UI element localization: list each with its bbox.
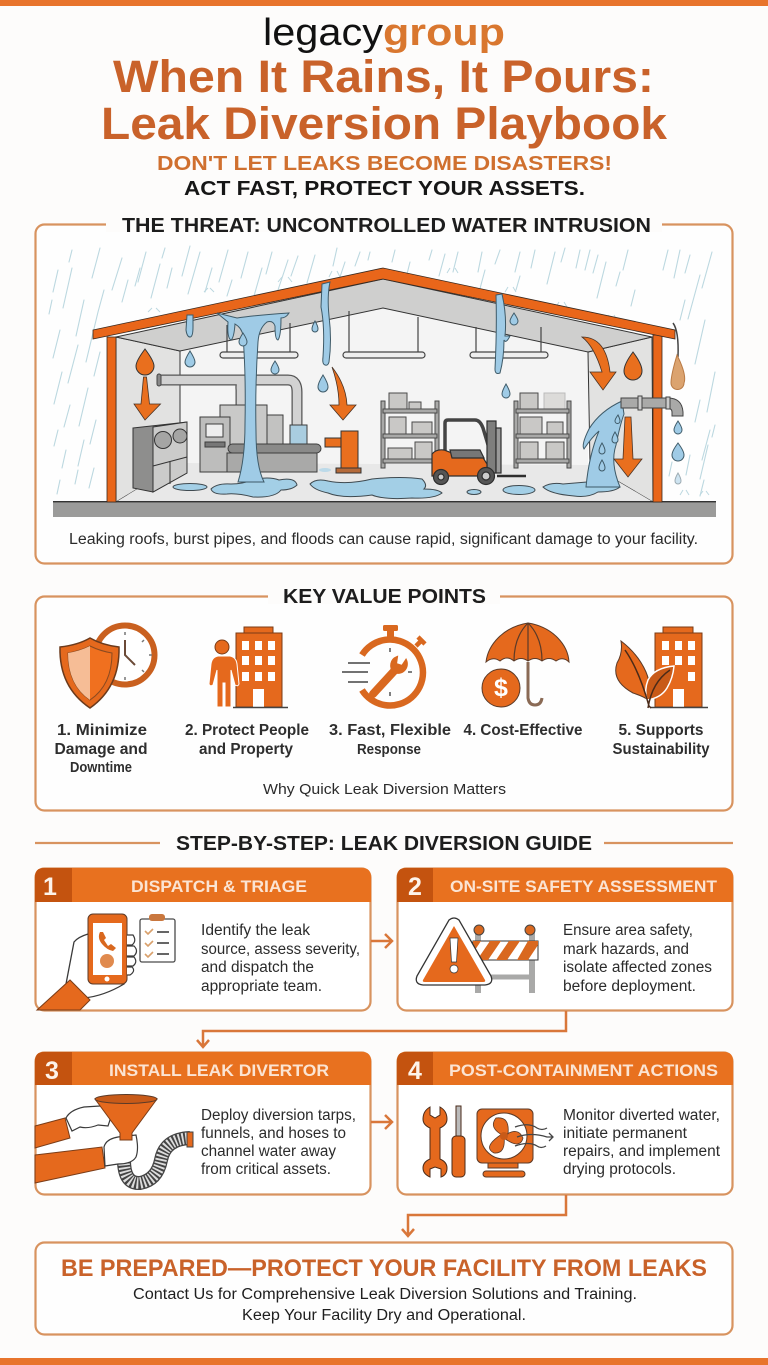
caption: why quick leak diversion matters: Why Quick Leak Diversion Matters <box>263 781 506 798</box>
labels: value points: and Property <box>199 741 293 758</box>
step card 1: dispatch and triage <box>35 868 371 1010</box>
step card 4: post-containment actions: 4 <box>408 1057 422 1085</box>
orange valve <box>325 431 361 473</box>
ductwork <box>157 374 297 425</box>
icon: person and building <box>209 627 288 708</box>
arrow: step 2 to step 3 <box>197 1011 566 1047</box>
text: step 3 <box>201 1107 356 1178</box>
ground slab <box>53 502 716 517</box>
icon: road barrier <box>473 925 538 993</box>
icon: drying fan <box>477 1109 553 1177</box>
bottom accent bar <box>0 1358 768 1365</box>
text: step 4: initiate permanent <box>563 1125 688 1142</box>
floor <box>116 463 653 502</box>
heading: the threat: THE THREAT: UNCONTROLLED WATER INTRUSION <box>122 214 651 237</box>
labels: value points: Damage and <box>54 741 148 758</box>
labels: value points <box>54 722 710 776</box>
orange drops <box>136 349 642 380</box>
text: step 2: isolate affected zones <box>563 959 712 976</box>
logo: legacygroup: legacy <box>263 12 383 54</box>
illustration: leaking warehouse <box>49 246 716 517</box>
icon: shield and clock <box>60 626 154 708</box>
labels: value points: 4. Cost-Effective <box>464 722 583 739</box>
outside roof drip <box>671 323 685 390</box>
text: step 2: mark hazards, and <box>563 941 689 958</box>
icon: checklist clipboard <box>140 914 175 962</box>
text: step 4: Monitor diverted water, <box>563 1107 720 1124</box>
step card 1: dispatch and triage: DISPATCH & TRIAGE <box>131 877 307 896</box>
labels: value points: Downtime <box>70 759 132 776</box>
title <box>101 51 668 149</box>
text: step 1: and dispatch the <box>201 959 314 976</box>
icon: stopwatch with wrench <box>342 625 425 706</box>
top accent bar <box>0 0 768 6</box>
step card 2: on-site safety assessment: ON-SITE SAFETY ASSESSMENT <box>450 877 718 896</box>
step card 2: on-site safety assessment: 2 <box>408 873 422 901</box>
step card 4: post-containment actions: POST-CONTAINMENT ACTIONS <box>449 1061 718 1080</box>
back wall <box>180 308 588 466</box>
step card 3: install leak divertor: 3 <box>45 1057 59 1085</box>
side walls <box>116 337 180 502</box>
text: contact: Keep Your Facility Dry and Operational. <box>242 1307 526 1324</box>
burst pipe <box>621 396 683 416</box>
arrow: step 4 to call to action <box>402 1195 566 1236</box>
subtitle: DON'T LET LEAKS BECOME DISASTERS! <box>157 152 612 175</box>
text: step 1 <box>201 922 360 995</box>
ceiling <box>116 279 652 352</box>
text: step 1: source, assess severity, <box>201 941 360 958</box>
step card 3: install leak divertor <box>35 1052 371 1194</box>
panel: key value points <box>36 585 732 810</box>
forklift <box>432 420 526 484</box>
arrow: step 1 to step 2 <box>371 934 392 948</box>
ceiling lights <box>220 311 548 358</box>
icon: wrench and screwdriver <box>423 1106 465 1177</box>
heading: key value points: KEY VALUE POINTS <box>283 585 486 608</box>
icon: leaves and building <box>616 627 708 708</box>
threat caption: Leaking roofs, burst pipes, and floods can cause rapid, significant damage to your facility. <box>69 531 698 548</box>
text: step 4: repairs, and implement <box>563 1143 721 1160</box>
text: step 2: Ensure area safety, <box>563 922 693 939</box>
text: step 3: Deploy diversion tarps, <box>201 1107 356 1124</box>
labels: value points: Sustainability <box>612 741 710 758</box>
text: step 3: funnels, and hoses to <box>201 1125 346 1142</box>
arrow: step 3 to step 4 <box>371 1115 392 1129</box>
panel: the threat <box>36 214 732 564</box>
labels: value points: Response <box>357 741 421 758</box>
labels: value points: 1. Minimize <box>57 722 147 739</box>
text: step 1: appropriate team. <box>201 978 322 995</box>
text: step 3: from critical assets. <box>201 1161 331 1178</box>
subtitle <box>157 152 612 200</box>
step card 2: on-site safety assessment <box>397 868 733 1010</box>
text: step 1: Identify the leak <box>201 922 310 939</box>
heading: step by step: STEP-BY-STEP: LEAK DIVERSION GUIDE <box>176 832 592 855</box>
step card 4: post-containment actions <box>397 1052 733 1194</box>
labels: value points: 5. Supports <box>618 722 704 739</box>
chiller unit <box>133 422 187 492</box>
puddles <box>173 468 620 499</box>
subtitle: ACT FAST, PROTECT YOUR ASSETS. <box>184 177 585 200</box>
heading: be prepared: BE PREPARED—PROTECT YOUR FACILITY FROM LEAKS <box>61 1255 707 1282</box>
main water column <box>217 313 289 482</box>
orange warning arrows <box>134 337 642 477</box>
drips and drops <box>185 282 684 487</box>
title: When It Rains, It Pours: <box>113 51 654 102</box>
icon: umbrella and dollar coin: $ <box>494 674 508 702</box>
labels: value points: 3. Fast, Flexible <box>329 722 451 739</box>
panel: call to action <box>36 1242 732 1334</box>
step card 1: dispatch and triage: 1 <box>43 873 57 901</box>
labels: value points: 2. Protect People <box>185 722 309 739</box>
logo: legacygroup: group <box>383 12 505 54</box>
icon: phone in hand <box>37 914 136 1010</box>
icon: funnel, hands and hose <box>35 1094 193 1183</box>
storage racks with boxes <box>381 393 571 468</box>
roof and posts <box>93 268 675 502</box>
rain <box>49 246 715 496</box>
text: step 4 <box>563 1107 721 1178</box>
icon: warning triangle <box>416 918 492 985</box>
text: contact <box>133 1286 637 1324</box>
text: step 4: drying protocols. <box>563 1161 676 1178</box>
text: step 2 <box>563 922 712 995</box>
icon: umbrella and dollar coin <box>482 623 569 707</box>
industrial machine <box>200 405 321 472</box>
text: step 2: before deployment. <box>563 978 696 995</box>
text: contact: Contact Us for Comprehensive Leak Diversion Solutions and Training. <box>133 1286 637 1303</box>
title: Leak Diversion Playbook <box>101 98 668 149</box>
text: step 3: channel water away <box>201 1143 336 1160</box>
logo: legacygroup <box>263 12 505 54</box>
step card 3: install leak divertor: INSTALL LEAK DIVERTOR <box>109 1061 329 1080</box>
